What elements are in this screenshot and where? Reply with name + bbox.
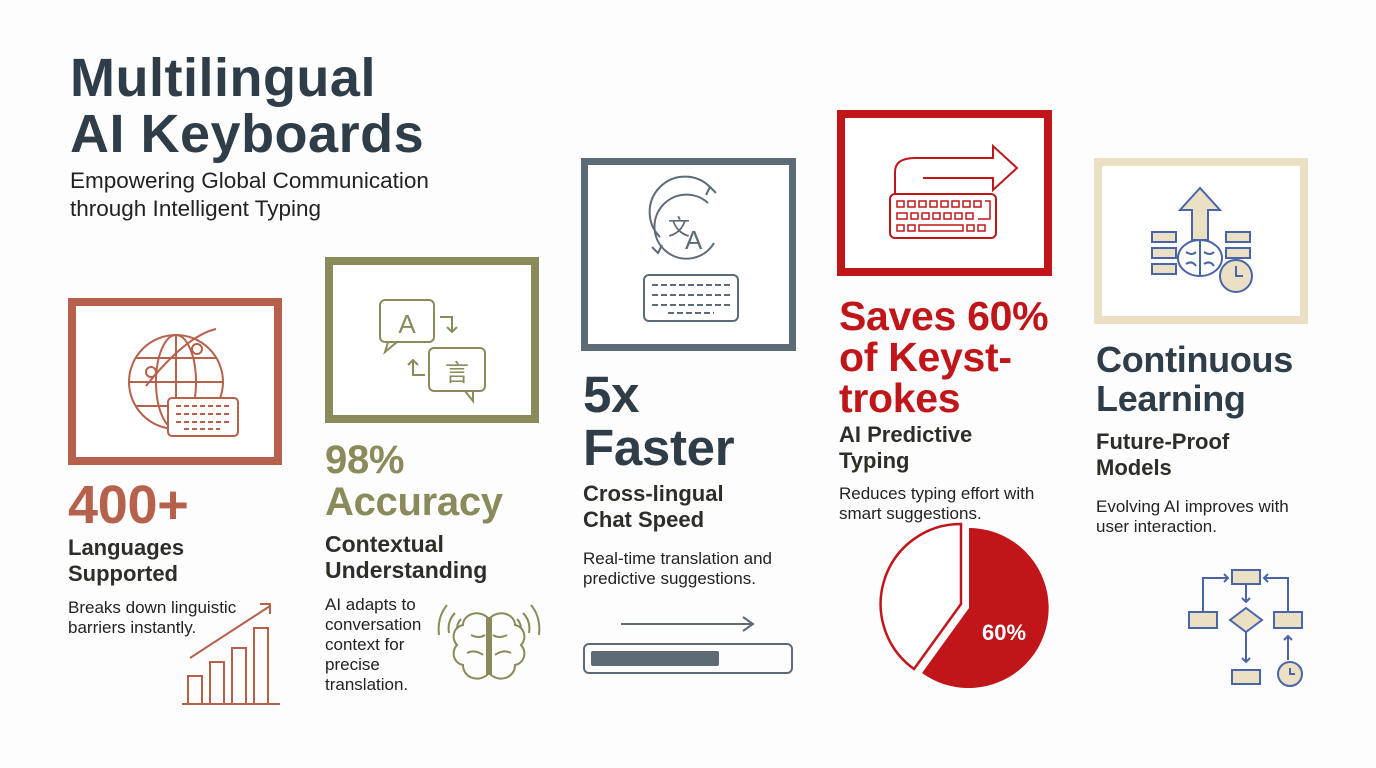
description: translation. <box>325 675 408 694</box>
icon box: translate keyboard <box>581 158 796 351</box>
description: barriers instantly. <box>68 618 196 637</box>
title: Multilingual <box>70 48 376 108</box>
description: Real-time translation and <box>583 549 772 568</box>
description: AI adapts to <box>325 595 416 614</box>
description: conversation <box>325 615 421 634</box>
subtitle <box>70 168 429 221</box>
subheading <box>583 481 724 532</box>
stat: 5x Faster: 5x <box>583 366 639 423</box>
heading: Learning <box>1096 378 1246 419</box>
description: Reduces typing effort with <box>839 484 1034 503</box>
heading <box>1096 339 1293 419</box>
chart: pie 60% <box>879 522 1049 688</box>
description: precise <box>325 655 380 674</box>
icon: flowchart <box>1188 569 1303 687</box>
subheading: Supported <box>68 561 178 586</box>
description: user interaction. <box>1096 517 1217 536</box>
description: Breaks down linguistic <box>68 598 236 617</box>
progress bar <box>583 643 793 674</box>
subtitle: through Intelligent Typing <box>70 196 321 221</box>
stat: Saves 60%: of Keyst- <box>839 334 1012 380</box>
stat: 5x Faster: Faster <box>583 419 734 476</box>
stat: 400+: 400+ <box>68 475 188 535</box>
icon box: keyboard arrow <box>837 110 1052 276</box>
icon box: brain growth <box>1094 158 1308 324</box>
icon box: globe keyboard <box>68 298 282 465</box>
panel: speed <box>581 158 796 674</box>
subheading <box>839 422 972 473</box>
panel: accuracy <box>325 257 540 694</box>
description <box>68 598 236 637</box>
subheading <box>68 535 184 586</box>
subheading <box>1096 429 1230 480</box>
subheading: Understanding <box>325 557 487 583</box>
subheading: AI Predictive <box>839 422 972 447</box>
stat: 98% Accuracy: Accuracy <box>325 480 503 524</box>
icon box: chat translate: 言 <box>445 353 469 388</box>
icon: arrow <box>621 616 755 632</box>
description: predictive suggestions. <box>583 569 756 588</box>
stat: Saves 60%: trokes <box>839 375 960 421</box>
icon: brain <box>438 604 540 680</box>
stat: 98% Accuracy <box>325 438 503 524</box>
subheading: Cross-lingual <box>583 481 724 506</box>
stat: Saves 60%: Saves 60% <box>839 293 1048 339</box>
description <box>839 484 1034 523</box>
subheading: Contextual <box>325 531 444 557</box>
description <box>325 595 421 694</box>
stat: 98% Accuracy: 98% <box>325 438 404 482</box>
description: context for <box>325 635 404 654</box>
icon: bar chart <box>182 603 280 705</box>
description: smart suggestions. <box>839 504 982 523</box>
icon box: translate keyboard: A <box>685 225 703 255</box>
icon box: chat translate: A <box>398 309 416 339</box>
icon box: chat translate <box>325 257 539 423</box>
description <box>583 549 772 588</box>
stat: Saves 60% <box>839 293 1048 421</box>
subheading: Chat Speed <box>583 507 704 532</box>
description <box>1096 497 1289 536</box>
subheading: Future-Proof <box>1096 429 1229 454</box>
panel: languages <box>68 298 282 705</box>
chart: pie 60%: 60% <box>982 620 1026 645</box>
panel: learning <box>1094 158 1308 687</box>
subheading: Models <box>1096 455 1172 480</box>
subheading: Languages <box>68 535 184 560</box>
subheading: Typing <box>839 448 909 473</box>
description: Evolving AI improves with <box>1096 497 1289 516</box>
stat: 5x Faster <box>583 366 734 476</box>
title: AI Keyboards <box>70 104 424 164</box>
subtitle: Empowering Global Communication <box>70 168 429 193</box>
icon box: translate keyboard: 文 <box>668 210 690 242</box>
subheading <box>325 531 487 583</box>
heading: Continuous <box>1096 339 1293 380</box>
panel: keystrokes <box>837 110 1052 688</box>
title <box>70 48 424 164</box>
